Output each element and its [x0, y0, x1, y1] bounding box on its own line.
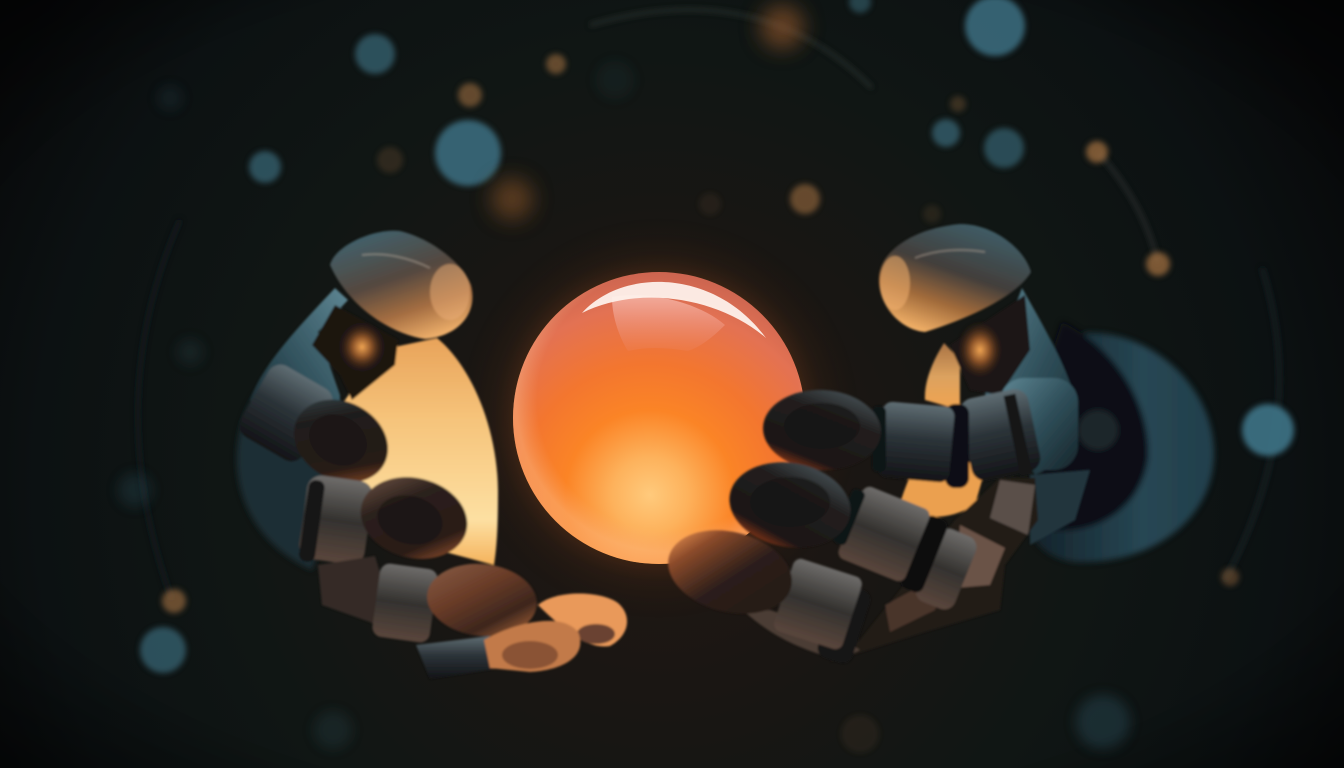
finger 1 [234, 359, 403, 498]
soft amber glows [491, 5, 804, 220]
inner joints [950, 295, 1030, 395]
finger 3 [659, 518, 873, 666]
wrist [985, 288, 1078, 475]
thumb [330, 231, 472, 339]
glowing orb [513, 272, 805, 564]
orb halo [459, 218, 859, 618]
thumb [879, 224, 1031, 332]
glowing palm [340, 338, 498, 565]
finger 4 [416, 621, 580, 679]
left hand [234, 231, 627, 679]
finger 1 [761, 378, 1078, 488]
finger 3 [318, 556, 540, 644]
glowing palm [925, 343, 960, 410]
finger 2 [297, 466, 476, 570]
back knuckles [1030, 470, 1090, 545]
faint orbit arcs [138, 10, 1279, 600]
orb highlight [582, 282, 766, 338]
small finger [538, 593, 627, 647]
orb reflection [612, 295, 725, 351]
finger 2 [723, 453, 980, 613]
teal backing [237, 395, 340, 570]
lower mechanical joints [830, 478, 1038, 662]
inner joints [312, 305, 398, 400]
amber particles [162, 54, 1239, 753]
blue particles [140, 0, 1294, 673]
right hand [659, 224, 1214, 666]
arm housing [1030, 322, 1214, 562]
dim blue particles [118, 61, 1130, 749]
wrist [250, 288, 348, 430]
